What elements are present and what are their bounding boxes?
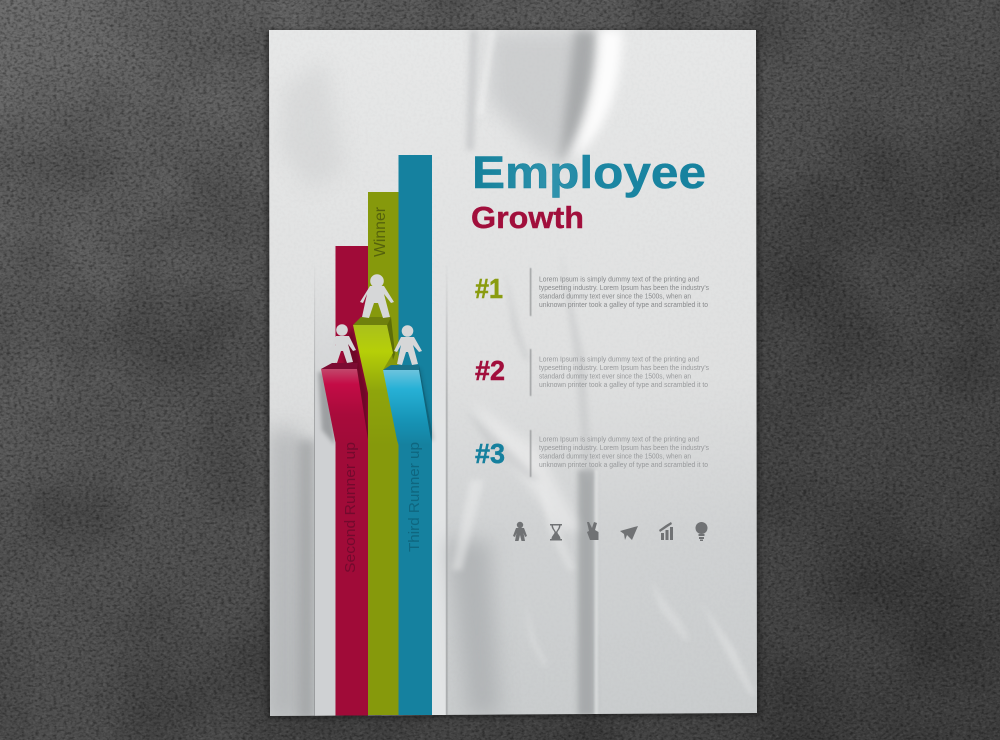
description 2: unknown printer took a galley of type and scrambled it to	[539, 380, 708, 389]
icon row	[513, 522, 708, 541]
poster shadow	[266, 30, 760, 719]
description 3: typesetting industry. Lorem Ipsum has been the industry's	[539, 443, 709, 452]
rank number 1: #1	[475, 273, 503, 304]
rank 1 entry	[475, 268, 709, 316]
bar: third runner up	[398, 155, 432, 715]
ribbon: second runner up	[321, 363, 368, 445]
description 3	[539, 434, 709, 469]
poster sheet	[260, 20, 770, 730]
rank number 3: #3	[475, 438, 505, 469]
ribbon: third runner up	[383, 365, 432, 445]
title line: Employee: Employee	[472, 147, 706, 198]
figure: third runner up	[394, 325, 422, 365]
icon: growth chart	[659, 522, 673, 540]
label: Third Runner up: Third Runner up	[406, 442, 423, 552]
description 3: unknown printer took a galley of type and scrambled it to	[539, 460, 708, 469]
bar: second runner up	[336, 246, 368, 716]
description 1: unknown printer took a galley of type and scrambled it to	[539, 300, 708, 309]
divider 3	[530, 430, 531, 477]
icon: light bulb	[696, 522, 708, 541]
description 1: typesetting industry. Lorem Ipsum has been the industry's	[539, 283, 709, 292]
icon: victory hand	[587, 522, 598, 540]
description 1	[539, 274, 709, 309]
description 3: Lorem Ipsum is simply dummy text of the printing and	[539, 434, 699, 444]
title line: Growth: Growth	[471, 200, 584, 235]
wrinkles and shading	[269, 30, 755, 720]
description 1: standard dummy text ever since the 1500s, when an	[539, 292, 691, 300]
description 3: standard dummy text ever since the 1500s, when an	[539, 452, 691, 460]
rank 3 entry	[475, 430, 709, 477]
description 2	[539, 354, 709, 389]
rank number 2: #2	[475, 355, 505, 386]
divider 1	[530, 268, 531, 316]
label: Second Runner up: Second Runner up	[342, 442, 359, 573]
icon: paper plane	[620, 526, 638, 540]
icon: hourglass	[550, 524, 562, 540]
description 1: Lorem Ipsum is simply dummy text of the printing and	[539, 274, 699, 284]
rank 2 entry	[475, 349, 709, 396]
bar: winner	[368, 192, 398, 715]
label: Winner: Winner	[372, 207, 389, 257]
description 2: Lorem Ipsum is simply dummy text of the printing and	[539, 354, 699, 364]
title	[471, 147, 706, 235]
bar chart: ribbons	[318, 155, 434, 716]
ribbon shadows	[345, 325, 368, 440]
ribbon: winner	[353, 317, 398, 445]
description 2: standard dummy text ever since the 1500s, when an	[539, 372, 691, 380]
divider 2	[530, 349, 531, 396]
figure: second runner up	[330, 324, 356, 363]
figure: winner	[360, 274, 394, 318]
icon: person	[513, 522, 527, 541]
description 2: typesetting industry. Lorem Ipsum has been the industry's	[539, 363, 709, 372]
